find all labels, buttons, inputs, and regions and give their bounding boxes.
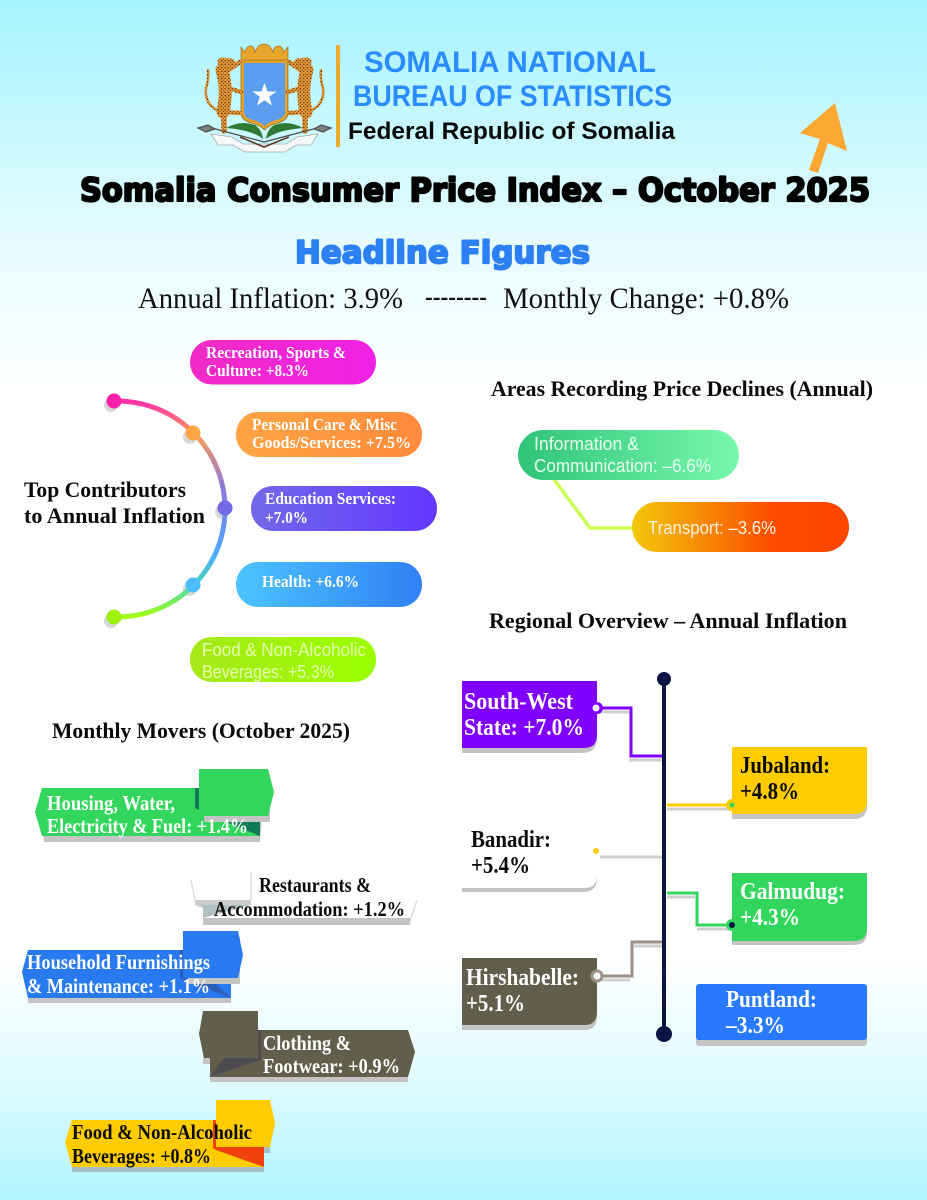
pill: personal care: Goods/Services: +7.5% bbox=[252, 433, 411, 452]
chart: contributors arc with nodes bbox=[104, 394, 232, 628]
headline figures text: Annual Inflation: 3.9% bbox=[138, 282, 403, 315]
heading: monthly movers: Monthly Movers (October 2025) bbox=[52, 718, 350, 743]
ribbon: clothing bbox=[199, 1011, 415, 1082]
box: banadir bbox=[462, 821, 599, 892]
ribbon: housing: Housing, Water, bbox=[47, 791, 175, 815]
box: puntland: Puntland: bbox=[726, 987, 817, 1013]
ribbon: restaurants bbox=[191, 872, 417, 925]
pill: transport: Transport: –3.6% bbox=[648, 518, 776, 538]
ribbon: housing bbox=[35, 769, 274, 842]
pill: health: Health: +6.6% bbox=[262, 572, 359, 591]
timeline axis bbox=[656, 672, 672, 1042]
divider bar: header bbox=[336, 45, 340, 147]
box: galmudug: +4.3% bbox=[740, 905, 800, 931]
title: Somalia Consumer Price Index – October 2025 bbox=[80, 171, 870, 209]
pill: food: Beverages: +5.3% bbox=[202, 662, 334, 682]
heading: organisation name: BUREAU OF STATISTICS bbox=[353, 80, 672, 113]
ribbon: restaurants: Restaurants & bbox=[259, 873, 371, 897]
heading: top contributors: to Annual Inflation bbox=[24, 503, 205, 528]
box: banadir: +5.4% bbox=[471, 853, 530, 879]
icon: palm leaves bbox=[226, 123, 303, 139]
connector: declines bbox=[553, 478, 634, 528]
heading: organisation name bbox=[348, 46, 676, 145]
connector: galmudug bbox=[667, 893, 732, 925]
box: jubaland: Jubaland: bbox=[740, 753, 830, 779]
box: galmudug: Galmudug: bbox=[740, 879, 845, 905]
box: puntland bbox=[696, 984, 867, 1046]
box: south-west state bbox=[462, 681, 603, 753]
icon: crown bbox=[241, 44, 288, 61]
pill: education: Education Services: bbox=[265, 489, 396, 508]
box: hirshabelle: +5.1% bbox=[466, 991, 525, 1017]
pill: recreation: Culture: +8.3% bbox=[206, 361, 309, 380]
icon: right leopard bbox=[288, 62, 323, 131]
ribbon: clothing: Clothing & bbox=[263, 1031, 351, 1055]
icon: blue shield with star bbox=[241, 60, 288, 130]
pill: education: +7.0% bbox=[265, 508, 308, 527]
box: jubaland: +4.8% bbox=[740, 779, 799, 805]
ribbon: food: Beverages: +0.8% bbox=[72, 1144, 211, 1168]
pill: food: Food & Non-Alcoholic bbox=[202, 640, 366, 660]
box: banadir: Banadir: bbox=[471, 827, 551, 853]
connector: hirshabelle bbox=[597, 942, 664, 976]
pill: information and communication: Communication: –6.6% bbox=[534, 456, 711, 476]
headline figures text: -------- bbox=[425, 280, 487, 313]
pill: education bbox=[251, 486, 437, 531]
heading: organisation name: SOMALIA NATIONAL bbox=[364, 46, 656, 79]
heading: organisation name: Federal Republic of Somalia bbox=[348, 118, 676, 145]
icon: coat of arms of Somalia bbox=[198, 44, 331, 152]
heading: headline figures: Headline Figures bbox=[295, 235, 590, 271]
box: south-west state: State: +7.0% bbox=[464, 715, 584, 741]
box: south-west state: South-West bbox=[464, 689, 573, 715]
heading: price declines: Areas Recording Price Declines (Annual) bbox=[491, 376, 873, 401]
ribbon: food bbox=[65, 1100, 275, 1172]
pill: information and communication: Information & bbox=[534, 434, 639, 454]
box: hirshabelle: Hirshabelle: bbox=[466, 965, 579, 991]
box: hirshabelle bbox=[462, 958, 604, 1030]
chart: regional timeline bbox=[597, 672, 732, 1042]
ribbon: household furnishings: & Maintenance: +1.1% bbox=[27, 974, 210, 998]
heading: top contributors bbox=[24, 477, 205, 528]
box: galmudug bbox=[726, 873, 867, 945]
pill: personal care bbox=[236, 412, 422, 457]
ribbon: household furnishings: Household Furnishings bbox=[27, 950, 210, 974]
ribbon: clothing: Footwear: +0.9% bbox=[263, 1054, 400, 1078]
headline figures text bbox=[138, 280, 789, 315]
headline figures text: Monthly Change: +0.8% bbox=[503, 282, 789, 315]
pill: recreation: Recreation, Sports & bbox=[206, 343, 346, 362]
ribbon: housing: Electricity & Fuel: +1.4% bbox=[47, 814, 248, 838]
ribbon: household furnishings bbox=[22, 931, 243, 1003]
icon: white ribbon bbox=[211, 134, 318, 152]
connector: south-west bbox=[597, 708, 664, 756]
pill: transport bbox=[632, 502, 849, 552]
box: jubaland bbox=[726, 747, 867, 819]
connector shadows bbox=[598, 712, 730, 980]
pill: health bbox=[236, 562, 422, 607]
box: puntland: –3.3% bbox=[725, 1013, 785, 1039]
connector: jubaland bbox=[667, 804, 732, 806]
pill: food bbox=[190, 637, 376, 682]
icon: left leopard bbox=[206, 62, 241, 131]
pill: personal care: Personal Care & Misc bbox=[252, 415, 397, 434]
icon: rising orange arrow bbox=[800, 103, 847, 173]
pill: recreation bbox=[190, 340, 376, 384]
ribbon: food: Food & Non-Alcoholic bbox=[72, 1120, 252, 1144]
ribbon: restaurants: Accommodation: +1.2% bbox=[214, 897, 405, 921]
heading: regional overview: Regional Overview – Annual Inflation bbox=[489, 608, 847, 633]
icon: spears bbox=[198, 125, 331, 142]
heading: top contributors: Top Contributors bbox=[24, 477, 186, 502]
pill: information and communication bbox=[518, 430, 739, 480]
